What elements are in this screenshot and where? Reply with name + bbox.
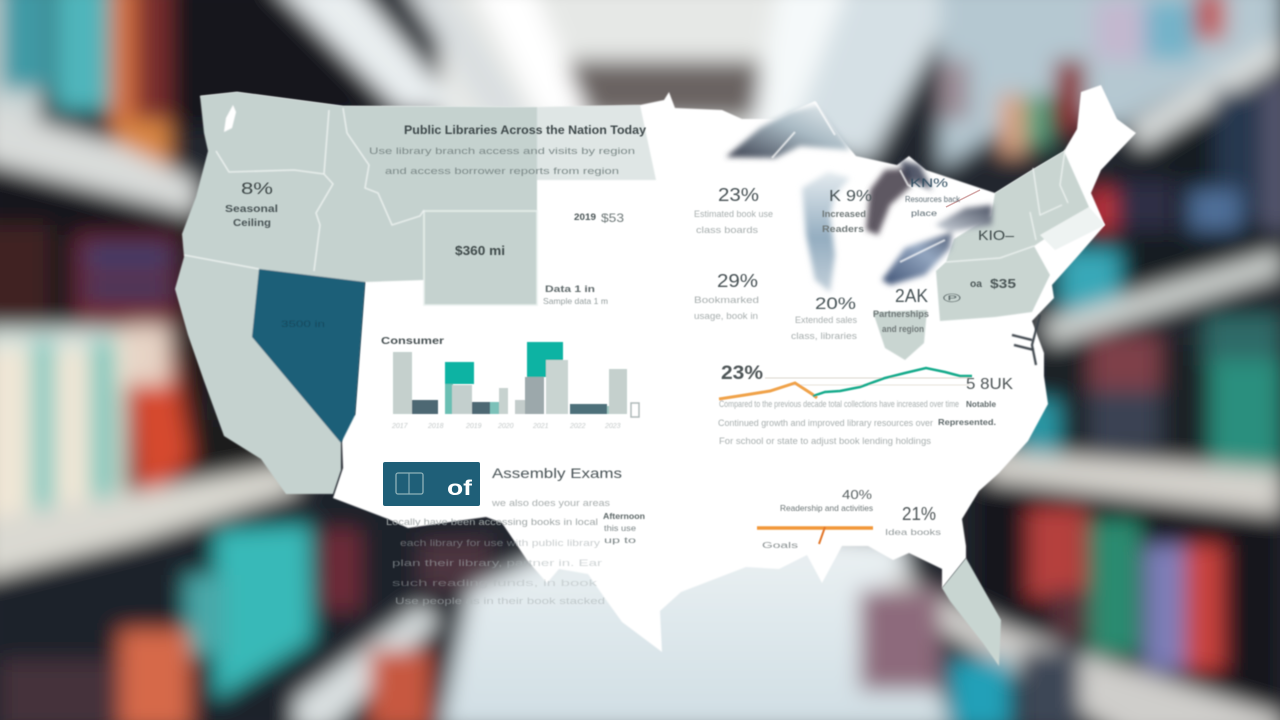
- stat: 23 percent block: [694, 185, 773, 235]
- stat: 20 percent block: class, libraries: [791, 331, 858, 341]
- text block: line chart notes: Continued growth and improved library resources over: [718, 418, 933, 428]
- text block: line chart notes: For school or state to adjust book lending holdings: [719, 436, 932, 446]
- stat: bottom right 21 percent: Idea books: [885, 527, 941, 537]
- stat: 29 percent block: Bookmarked: [694, 295, 759, 305]
- map: north-east gray states: [873, 150, 1105, 365]
- states: New England New York Pennsylvania: [936, 151, 1089, 321]
- left lower shelf: [0, 465, 300, 590]
- chart axis labels: 2023: [604, 423, 621, 430]
- chart axis labels: 2020: [497, 423, 514, 430]
- text block: card body: Locally have been accessing books in local: [386, 517, 598, 527]
- accent: Lake Ontario red streak: [946, 190, 980, 207]
- stat: 20 percent block: [791, 294, 858, 341]
- stat: 29 percent block: 29%: [717, 271, 758, 291]
- chart axis labels: 2018: [427, 423, 444, 430]
- stat: Wyoming: $360 mi: [455, 243, 505, 258]
- stat: top right small: 2019: [574, 212, 596, 222]
- chart: line chart: Represented.: [938, 417, 996, 427]
- chart: bar chart: [381, 335, 639, 430]
- stat: Colorado note: [543, 284, 608, 306]
- state: Long Island sliver: [1040, 207, 1105, 250]
- teal book lower left: [215, 525, 312, 700]
- stat: bottom right 40 percent: [757, 487, 873, 550]
- callout: card note: this use: [604, 524, 637, 533]
- chart axis labels: 2022: [569, 423, 586, 430]
- stat: bottom right 40 percent: Readership and activities: [780, 503, 873, 513]
- all map text labels: [225, 125, 1016, 606]
- text block: line chart notes: Compared to the previous decade total collections have increased over time: [719, 399, 959, 409]
- callout: card note: Afternoon: [603, 512, 645, 521]
- bottom centre pale floor: [440, 520, 950, 720]
- left middle books: [0, 225, 50, 335]
- stat: New York: KIO–: [978, 227, 1014, 243]
- stat: Colorado note: Sample data 1 m: [543, 296, 608, 306]
- stat: bottom right 21 percent: 21%: [902, 504, 936, 524]
- stat: Georgian block: Resources back: [905, 195, 961, 204]
- stat: 2.4K block: [873, 286, 929, 334]
- chart axis labels: 2019: [465, 423, 482, 430]
- right upper books: [940, 0, 1280, 170]
- lake: Michigan: [802, 172, 850, 292]
- icon: book outline: [396, 473, 423, 494]
- stat: bottom right 40 percent: Goals: [762, 541, 798, 550]
- lake: Erie: [882, 232, 952, 285]
- stat: 2.4K block: 2AK: [895, 286, 928, 306]
- stat: Oregon: Ceiling: [233, 218, 271, 229]
- map: Florida: [942, 558, 1001, 666]
- state: Ohio: [873, 310, 927, 360]
- state: Nevada highlighted: [252, 269, 365, 443]
- chart title: Consumer: [381, 335, 444, 347]
- chart: line chart: Notable: [966, 399, 996, 409]
- stat: Pennsylvania: $35: [990, 276, 1016, 291]
- text block: card body: plan their library, partner in. Ear: [392, 558, 602, 568]
- states: Washington Oregon Idaho Montana California: [175, 92, 537, 494]
- stat: 2.4K block: and region: [882, 324, 924, 334]
- lake: Georgian Bay: [900, 160, 932, 190]
- state borders: [184, 108, 424, 271]
- stat: bottom right 40 percent: 40%: [842, 487, 872, 502]
- stat: Nevada: 3500 in: [281, 319, 325, 329]
- subtitle: and access borrower reports from region: [385, 166, 619, 177]
- text block: line chart notes: [718, 399, 959, 446]
- heading: card title: Assembly Exams: [492, 465, 622, 481]
- stat: bottom right 21 percent: [885, 504, 941, 537]
- stat: Michigan block: K 9%: [829, 188, 872, 205]
- stat: Pennsylvania: oa: [970, 279, 982, 290]
- chart: line chart: [719, 363, 1013, 427]
- stat: 23 percent block: class boards: [696, 225, 759, 235]
- lakes: white ice streaks: [772, 102, 945, 262]
- callout: card note: [603, 512, 645, 545]
- chart axis labels: 2017: [391, 423, 409, 430]
- lake: Ontario: [935, 205, 992, 232]
- card: teal icon card: [383, 462, 480, 506]
- stat: 20 percent block: Extended sales: [795, 315, 857, 325]
- stat: Oregon: Seasonal: [225, 204, 278, 215]
- map: white United States silhouette: [200, 85, 1136, 652]
- stat: Oregon: 8%: [241, 179, 273, 198]
- stat: Pennsylvania: [970, 276, 1016, 291]
- chart: line chart: 23%: [721, 363, 763, 384]
- stat: Michigan block: [822, 188, 872, 234]
- stat: Georgian block: place: [911, 209, 938, 218]
- right middle books: [1040, 345, 1280, 465]
- right lower books: [975, 485, 1280, 720]
- subtitle: Use library branch access and visits by region: [369, 146, 635, 157]
- map: Great Lakes: [726, 104, 992, 292]
- text block: card body: each library for use with public library: [400, 538, 601, 548]
- stat: Michigan block: Readers: [822, 224, 864, 234]
- stat: Georgian block: KN%: [910, 176, 948, 190]
- stat: 29 percent block: [694, 271, 759, 321]
- map: western gray states: [175, 92, 656, 494]
- stat: 23 percent block: Estimated book use: [694, 209, 773, 219]
- stat: Georgian block: [905, 176, 961, 218]
- text block: card body: Use people as in their book stacked: [395, 596, 605, 606]
- panel: translucent heading band: [537, 105, 656, 180]
- chart axis labels: 2021: [532, 423, 549, 430]
- stat: 29 percent block: usage, book in: [694, 311, 758, 321]
- icon: small plant glyph: ℗: [943, 291, 961, 305]
- bar: orange: [757, 526, 873, 530]
- stat: 20 percent block: 20%: [815, 294, 856, 313]
- icon: Puget Sound notch: [224, 105, 236, 132]
- title: Public Libraries Across the Nation Today: [404, 125, 647, 137]
- text block: card body: [386, 498, 611, 606]
- stat: top right small: $53: [601, 211, 624, 225]
- stat: 2.4K block: Partnerships: [873, 309, 929, 319]
- state: Chesapeake dark inlet: [1012, 315, 1040, 365]
- stat: Michigan block: Increased: [822, 209, 866, 219]
- lake: Huron: [866, 168, 912, 235]
- top left books: [0, 0, 40, 120]
- top centre light aisle: [440, 0, 840, 140]
- stat: Oregon: [225, 179, 278, 229]
- stat: 23 percent block: 23%: [718, 185, 759, 205]
- icon: person glyph: of: [447, 477, 473, 500]
- subtitle: [369, 146, 635, 177]
- text block: card body: we also does your areas: [491, 498, 611, 508]
- stat: Colorado note: Data 1 in: [545, 284, 595, 294]
- text block: card body: such reading funds, in book: [392, 578, 598, 588]
- left cream books: [0, 330, 125, 560]
- state: Wyoming box: [424, 211, 537, 305]
- stat: top right small: [574, 211, 624, 225]
- stat: line chart end value: 5 8UK: [966, 376, 1013, 393]
- lake: Superior: [726, 104, 850, 158]
- chart axis labels: [391, 423, 621, 430]
- callout: card note: up to: [604, 536, 637, 545]
